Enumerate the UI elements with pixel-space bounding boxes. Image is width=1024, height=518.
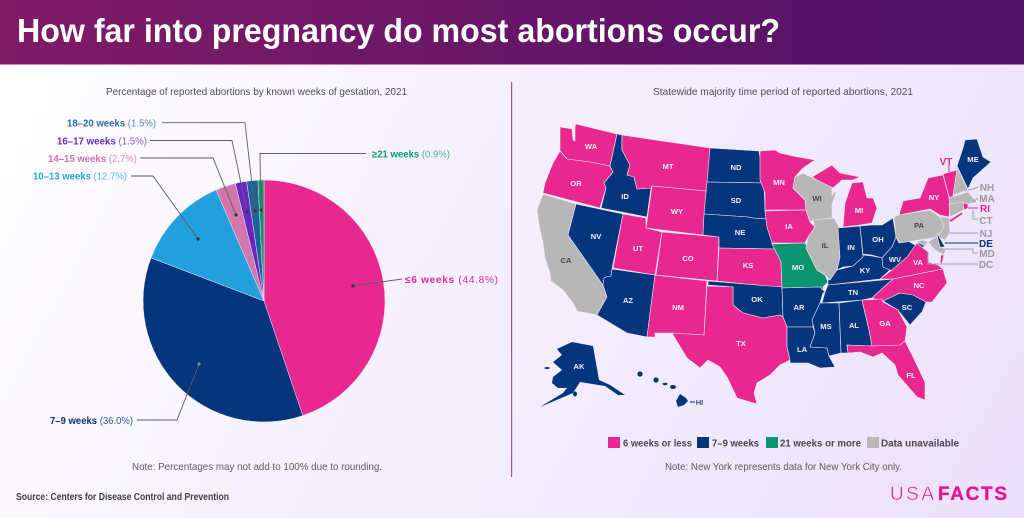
state abbreviations: OH bbox=[872, 235, 884, 244]
logo: USAFacts: FACTS bbox=[938, 484, 1007, 505]
state abbreviations: MN bbox=[773, 178, 785, 187]
small-state callouts: NJ bbox=[980, 229, 992, 240]
state abbreviations: WI bbox=[812, 194, 822, 203]
state abbreviations: CA bbox=[561, 256, 572, 265]
pie chart note: Note: Percentages may not add to 100% due to rounding. bbox=[132, 461, 382, 473]
small-state callouts: CT bbox=[979, 216, 993, 227]
pie label: 21 weeks or more bbox=[259, 150, 450, 212]
state abbreviations: CO bbox=[682, 254, 694, 263]
pie label: 10–13 weeks bbox=[33, 172, 200, 241]
state abbreviations: FL bbox=[906, 371, 916, 380]
state abbreviations: ID bbox=[621, 192, 629, 201]
header banner bbox=[0, 0, 1024, 64]
small-state callouts bbox=[928, 157, 995, 271]
state abbreviations: TX bbox=[736, 339, 746, 348]
state abbreviations: IN bbox=[847, 243, 855, 252]
map legend: 7–9 weeks bbox=[712, 438, 759, 450]
state abbreviations: AZ bbox=[623, 296, 633, 305]
state abbreviations: VA bbox=[913, 258, 924, 267]
state abbreviations: AL bbox=[849, 321, 859, 330]
pie label: 6 weeks or less bbox=[351, 275, 498, 288]
state abbreviations: ME bbox=[967, 155, 979, 164]
small-state callouts: DE bbox=[979, 239, 993, 250]
small-state callouts: VT bbox=[940, 157, 952, 168]
logo: USAFacts: USA bbox=[890, 484, 934, 505]
Hawaii label bbox=[690, 398, 703, 407]
pie label: 10–13 weeks: 10–13 weeks (12.7%) bbox=[33, 172, 127, 182]
US state map bbox=[537, 124, 991, 407]
map note: Note: New York represents data for New York City only. bbox=[665, 461, 902, 473]
state abbreviations: TN bbox=[848, 288, 858, 297]
panel: state map bbox=[537, 86, 995, 473]
map legend: 21 weeks or more bbox=[780, 438, 861, 450]
small-state callouts: DC bbox=[979, 260, 993, 271]
pie label: 7–9 weeks: 7–9 weeks (36.0%) bbox=[50, 416, 133, 427]
state abbreviations: NE bbox=[735, 228, 745, 237]
state abbreviations: WA bbox=[585, 142, 598, 151]
state abbreviations: NY bbox=[929, 193, 939, 202]
Hawaii bbox=[637, 371, 688, 407]
state abbreviations: MS bbox=[820, 322, 832, 331]
state abbreviations: SD bbox=[731, 196, 742, 205]
map subtitle: Statewide majority time period of reported abortions, 2021 bbox=[653, 86, 913, 98]
pie label: 14–15 weeks: 14–15 weeks (2.7%) bbox=[48, 154, 137, 165]
state abbreviations: IA bbox=[785, 222, 793, 231]
pie label: 21 weeks or more: ≥21 weeks (0.9%) bbox=[372, 150, 450, 160]
title: How far into pregnancy do most abortions occur? bbox=[17, 12, 780, 49]
state abbreviations: UT bbox=[633, 244, 643, 253]
state abbreviations: SC bbox=[902, 303, 913, 312]
map legend: Data unavailable bbox=[881, 438, 959, 450]
map legend bbox=[608, 437, 959, 450]
pie label: 18–20 weeks: 18–20 weeks (1.5%) bbox=[67, 118, 156, 130]
Hawaii label: HI bbox=[696, 398, 703, 407]
pie chart bbox=[143, 180, 385, 422]
state abbreviations: MO bbox=[792, 263, 804, 272]
state abbreviations: NM bbox=[672, 303, 684, 312]
pie label: 14–15 weeks bbox=[48, 154, 238, 217]
state abbreviations: KS bbox=[743, 261, 753, 270]
state abbreviations: PA bbox=[914, 221, 925, 230]
small-state callouts: NH bbox=[980, 183, 994, 194]
state abbreviations: OR bbox=[570, 179, 582, 188]
state abbreviations: WV bbox=[889, 255, 902, 264]
state abbreviations: MT bbox=[663, 162, 674, 171]
state abbreviations: ND bbox=[731, 163, 742, 172]
pie label: 18–20 weeks bbox=[67, 118, 257, 213]
state abbreviations: IL bbox=[822, 241, 829, 250]
source: Source: Centers for Disease Control and Prevention bbox=[16, 491, 229, 503]
pie label: 7–9 weeks bbox=[50, 362, 201, 427]
logo: USAFacts bbox=[890, 484, 1007, 505]
state abbreviations: KY bbox=[860, 266, 870, 275]
Alaska bbox=[540, 342, 625, 407]
map legend: 6 weeks or less bbox=[623, 438, 692, 450]
small-state callouts: RI bbox=[980, 204, 990, 215]
state abbreviations: OK bbox=[751, 295, 763, 304]
state abbreviations: GA bbox=[879, 319, 891, 328]
pie label: 16–17 weeks bbox=[57, 136, 249, 214]
state abbreviations: LA bbox=[797, 345, 808, 354]
small-state callouts: MD bbox=[979, 249, 995, 260]
state abbreviations: NV bbox=[591, 232, 602, 241]
state abbreviations: NC bbox=[914, 281, 925, 290]
pie label: 16–17 weeks: 16–17 weeks (1.5%) bbox=[57, 136, 147, 148]
pie chart subtitle: Percentage of reported abortions by known weeks of gestation, 2021 bbox=[106, 86, 407, 98]
panel: pie chart bbox=[33, 86, 498, 473]
state abbreviations: WY bbox=[671, 207, 683, 216]
small-state callouts: MA bbox=[979, 194, 995, 205]
state abbreviations: AK bbox=[574, 362, 585, 371]
state abbreviations: MI bbox=[855, 206, 863, 215]
pie label: 6 weeks or less: ≤6 weeks (44.8%) bbox=[405, 275, 498, 286]
state abbreviations bbox=[561, 142, 979, 380]
state abbreviations: AR bbox=[794, 303, 805, 312]
